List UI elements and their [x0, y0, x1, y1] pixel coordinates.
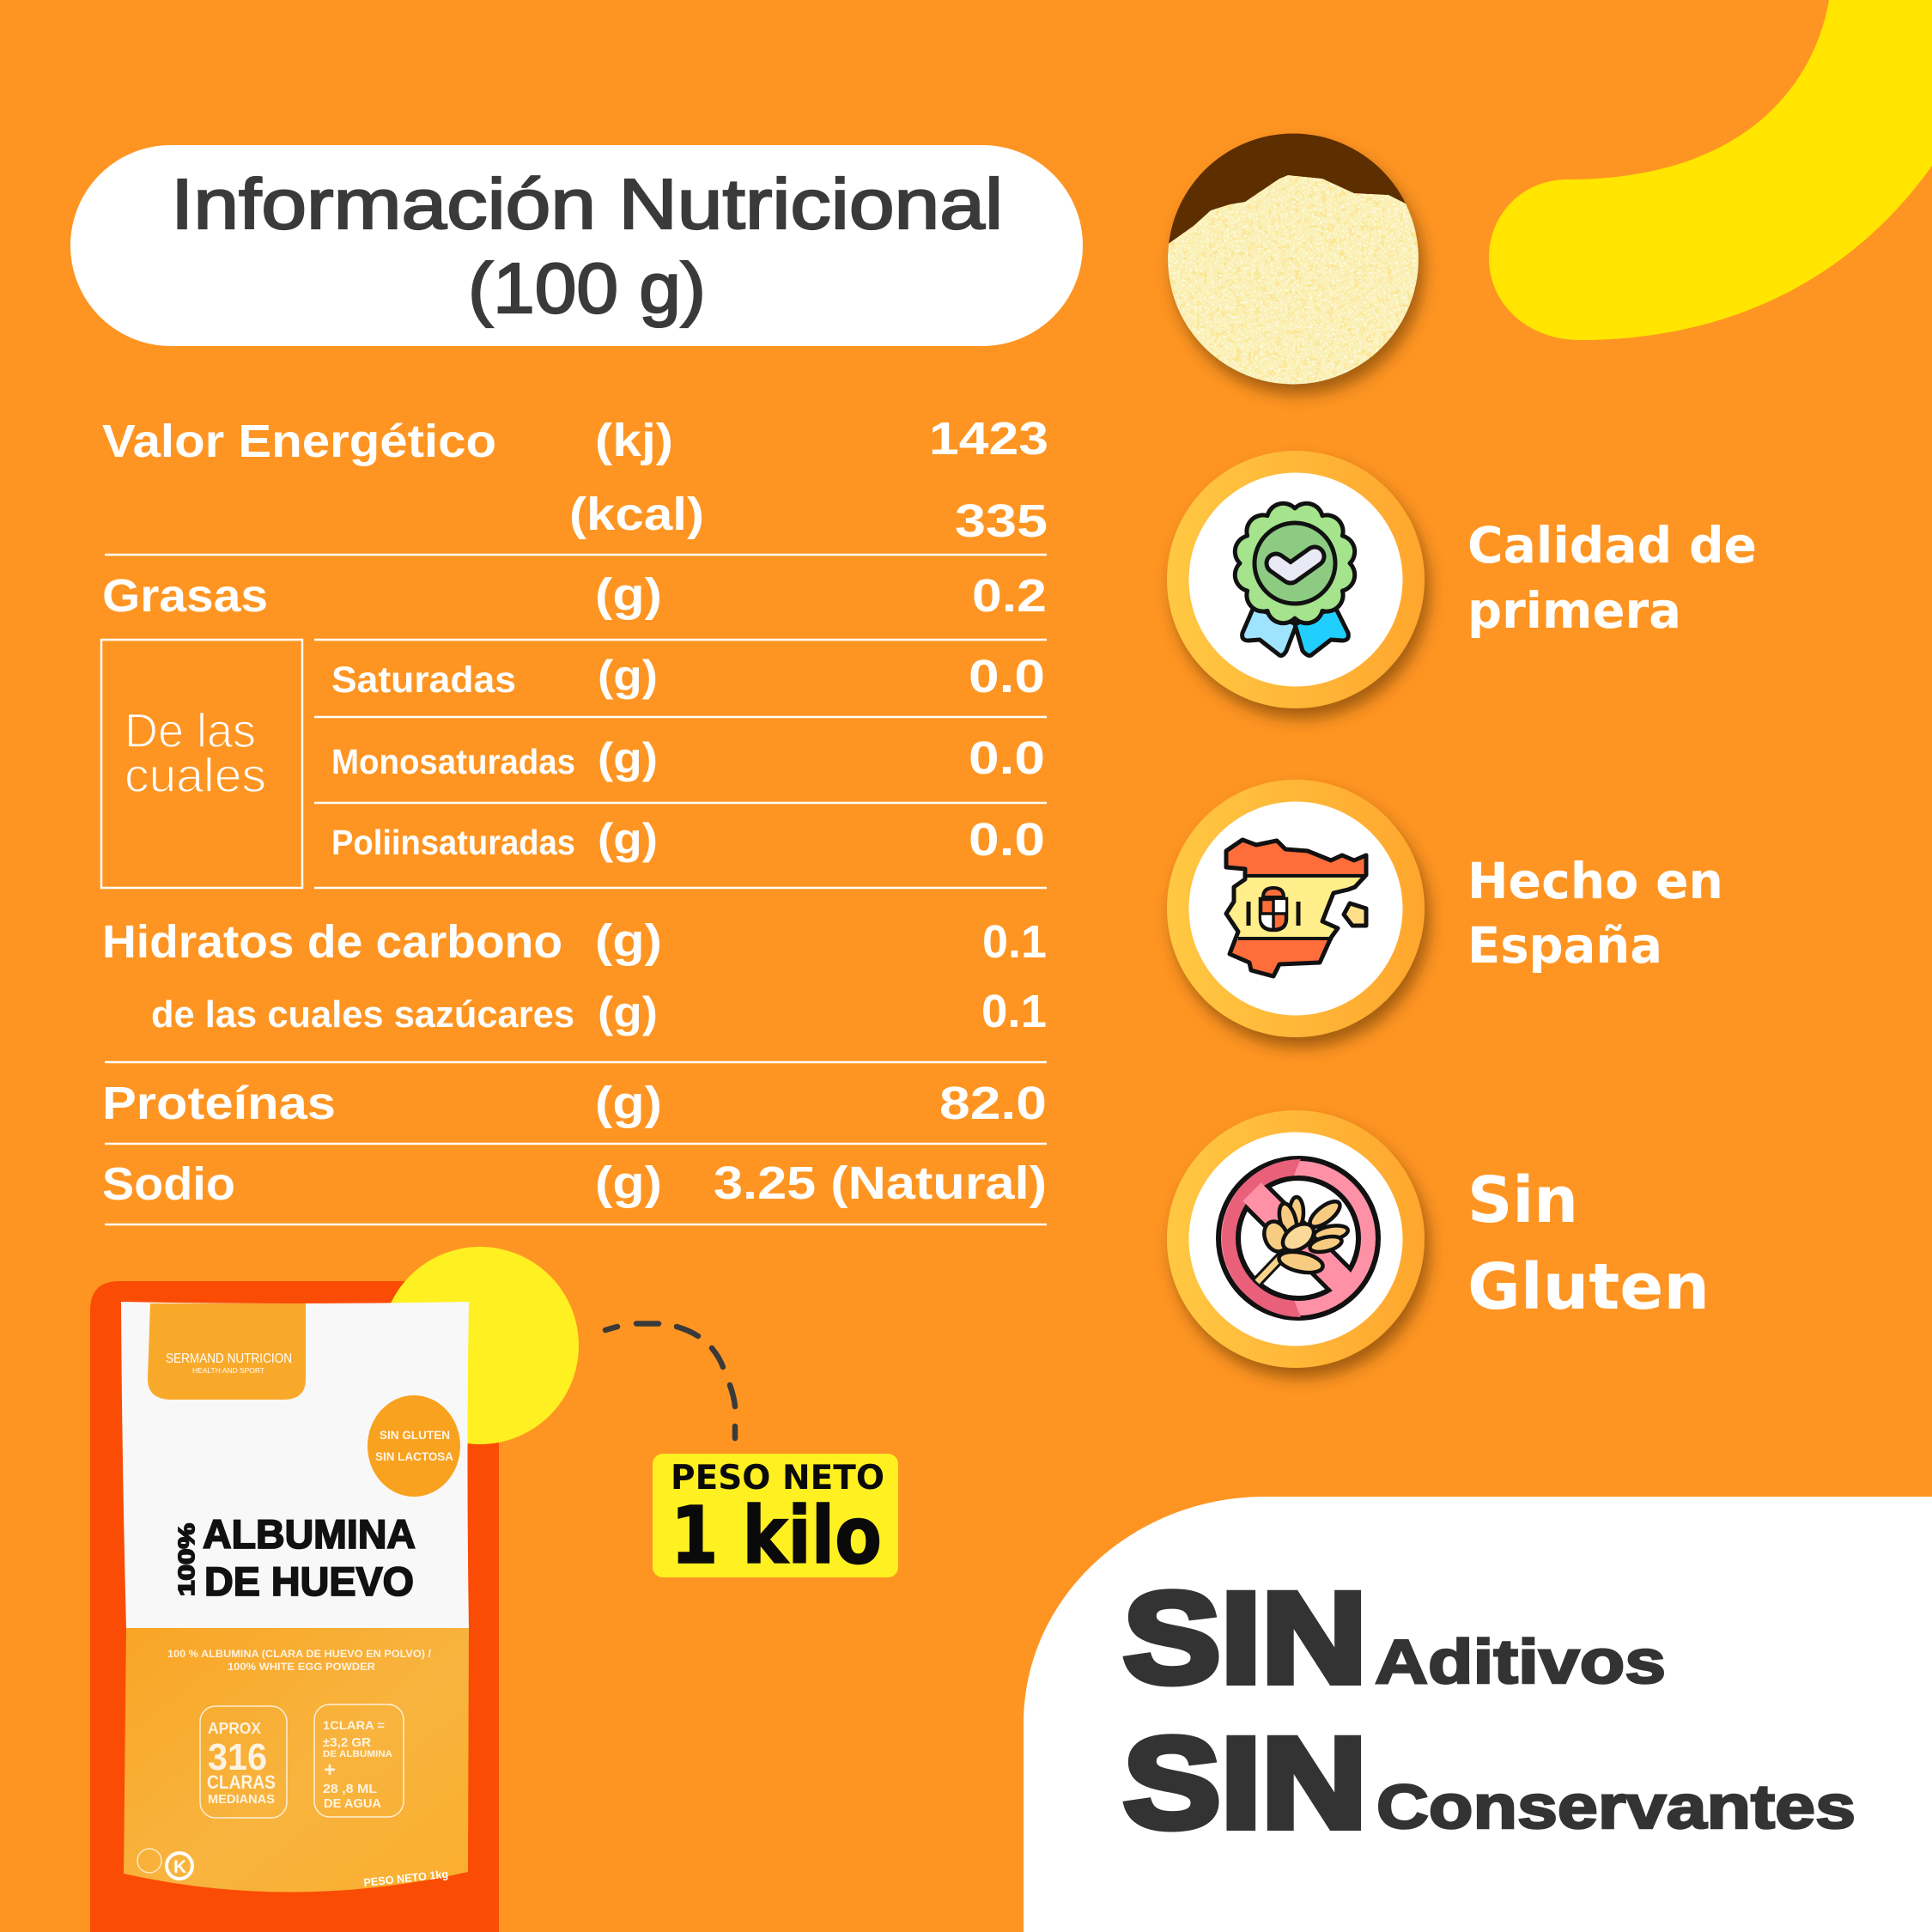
row: sodio	[102, 1157, 1047, 1210]
label: gluten free: Sin	[1467, 1163, 1578, 1237]
row: proteinas: Proteínas	[102, 1078, 336, 1129]
label: spain: Hecho en	[1467, 852, 1723, 910]
row: hidratos: 0.1	[982, 916, 1047, 968]
row: grasas: Grasas	[102, 570, 268, 622]
yellow circle	[381, 1247, 579, 1444]
title pill: Información Nutricional	[171, 164, 1003, 244]
row: hidratos: Hidratos de carbono	[102, 916, 562, 968]
row: hidratos	[102, 915, 1047, 968]
label: quality: primera	[1467, 581, 1681, 640]
row: saturadas: Saturadas	[331, 659, 516, 701]
row: grasas	[102, 569, 1047, 622]
title pill	[70, 145, 1083, 346]
row: azucares: (g)	[598, 988, 658, 1036]
row: monosaturadas	[331, 732, 1045, 784]
icon: spain map	[1224, 838, 1369, 979]
row: valor energetico: (kj)	[595, 415, 673, 466]
row: valor energetico: Valor Energético	[102, 416, 496, 467]
bag certification marks: K	[173, 1857, 186, 1877]
bag description	[167, 1648, 432, 1673]
bag seal: SIN LACTOSA	[375, 1449, 453, 1463]
bag product name: ALBUMINA	[203, 1511, 416, 1557]
bag seal	[368, 1395, 460, 1497]
icon: no wheat	[1218, 1158, 1378, 1318]
product backdrop	[90, 1281, 499, 1932]
bag info box right: DE AGUA	[324, 1796, 381, 1811]
bag product name	[173, 1511, 416, 1604]
box: de las cuales: De las	[125, 703, 256, 757]
row: azucares	[151, 986, 1047, 1037]
bag description: 100 % ALBUMINA (CLARA DE HUEVO EN POLVO) /	[167, 1648, 432, 1660]
label: gluten free	[1467, 1163, 1710, 1324]
label: quality: Calidad de	[1467, 516, 1757, 574]
row: proteinas: 82.0	[939, 1078, 1047, 1129]
row: saturadas	[331, 651, 1045, 702]
bag info box left: 316	[208, 1736, 267, 1778]
title pill: (100 g)	[468, 248, 706, 328]
weight badge: 1 kilo	[671, 1490, 882, 1582]
bag logo tab	[148, 1303, 306, 1400]
bag info box right: ±3,2 GR	[323, 1735, 371, 1750]
bag info box right	[314, 1704, 404, 1817]
badge: gluten free	[1167, 1110, 1425, 1368]
row: azucares: 0.1	[981, 986, 1047, 1037]
product bag	[121, 1302, 469, 1893]
row: valor energetico	[102, 413, 1048, 547]
label: quality	[1467, 516, 1757, 640]
text: sin aditivos	[1123, 1565, 1666, 1710]
row: monosaturadas: (g)	[598, 734, 658, 782]
row: grasas: 0.2	[972, 570, 1047, 622]
nutrition table	[101, 413, 1048, 1224]
powder photo	[1163, 129, 1425, 388]
row: poliinsaturadas: 0.0	[969, 814, 1045, 866]
label: spain	[1467, 852, 1723, 975]
row: valor energetico: 1423	[929, 413, 1048, 465]
bag info box left	[200, 1706, 287, 1818]
box: de las cuales	[101, 640, 302, 888]
weight badge	[653, 1454, 898, 1582]
badge: quality	[1167, 451, 1425, 708]
label: gluten free: Gluten	[1467, 1250, 1710, 1324]
text: sin conservantes: SIN	[1123, 1710, 1367, 1855]
bag info box left: MEDIANAS	[208, 1792, 275, 1807]
bag logo tab: SERMAND NUTRICION	[166, 1352, 292, 1366]
bottom white panel	[1024, 1497, 1932, 1932]
text: sin aditivos: SIN	[1123, 1565, 1367, 1710]
text: sin conservantes	[1123, 1710, 1856, 1855]
row: saturadas: (g)	[598, 652, 658, 700]
bag product name: DE HUEVO	[204, 1558, 414, 1604]
row: sodio: (g)	[595, 1157, 662, 1209]
box: de las cuales: cuales	[125, 748, 266, 802]
row: poliinsaturadas: Poliinsaturadas	[331, 823, 575, 862]
badge: spain	[1167, 780, 1425, 1037]
row: saturadas: 0.0	[969, 651, 1045, 702]
row: poliinsaturadas	[331, 814, 1045, 866]
row: valor energetico: 335	[955, 495, 1048, 547]
bag info box left: APROX	[208, 1720, 261, 1737]
row: monosaturadas: Monosaturadas	[331, 742, 575, 781]
row: proteinas	[102, 1078, 1047, 1129]
bag info box right: 1CLARA =	[323, 1718, 385, 1732]
bag product name: 100%	[173, 1523, 199, 1596]
bag net weight: PESO NETO 1kg	[363, 1868, 449, 1889]
text: sin aditivos: Aditivos	[1375, 1628, 1666, 1697]
bag info box right: DE ALBUMINA	[323, 1749, 392, 1759]
row: hidratos: (g)	[595, 915, 662, 967]
bag logo tab: HEALTH AND SPORT	[192, 1367, 264, 1375]
bag info box left: CLARAS	[207, 1771, 276, 1793]
row: grasas: (g)	[595, 569, 662, 621]
bag info box right: +	[324, 1759, 336, 1782]
bag description: 100% WHITE EGG POWDER	[228, 1661, 375, 1673]
row: poliinsaturadas: (g)	[598, 815, 658, 863]
label: spain: España	[1467, 916, 1662, 975]
bag seal: SIN GLUTEN	[380, 1428, 450, 1442]
dashed arrow	[605, 1324, 735, 1438]
row: proteinas: (g)	[595, 1078, 662, 1129]
row: azucares: de las cuales sazúcares	[151, 993, 574, 1036]
weight badge: PESO NETO	[671, 1459, 884, 1498]
row: sodio: Sodio	[102, 1158, 235, 1210]
bag certification marks	[137, 1849, 192, 1879]
row: monosaturadas: 0.0	[969, 732, 1045, 784]
icon: medal	[1235, 503, 1355, 655]
row: sodio: 3.25 (Natural)	[714, 1157, 1047, 1209]
bag info box right: 28 ,8 ML	[323, 1782, 377, 1796]
text: sin conservantes: Conservantes	[1376, 1773, 1856, 1842]
yellow curved shape	[1489, 0, 1932, 340]
row: valor energetico: (kcal)	[569, 489, 704, 540]
